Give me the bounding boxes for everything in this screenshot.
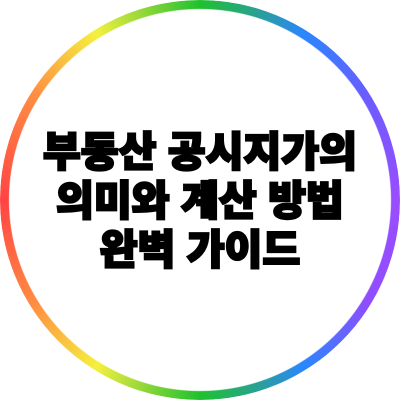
title: 의미와 계산 방법 bbox=[56, 178, 344, 224]
title bbox=[43, 129, 357, 273]
title: 완벽 가이드 bbox=[100, 227, 300, 273]
title: 부동산 공시지가의 bbox=[43, 129, 357, 175]
